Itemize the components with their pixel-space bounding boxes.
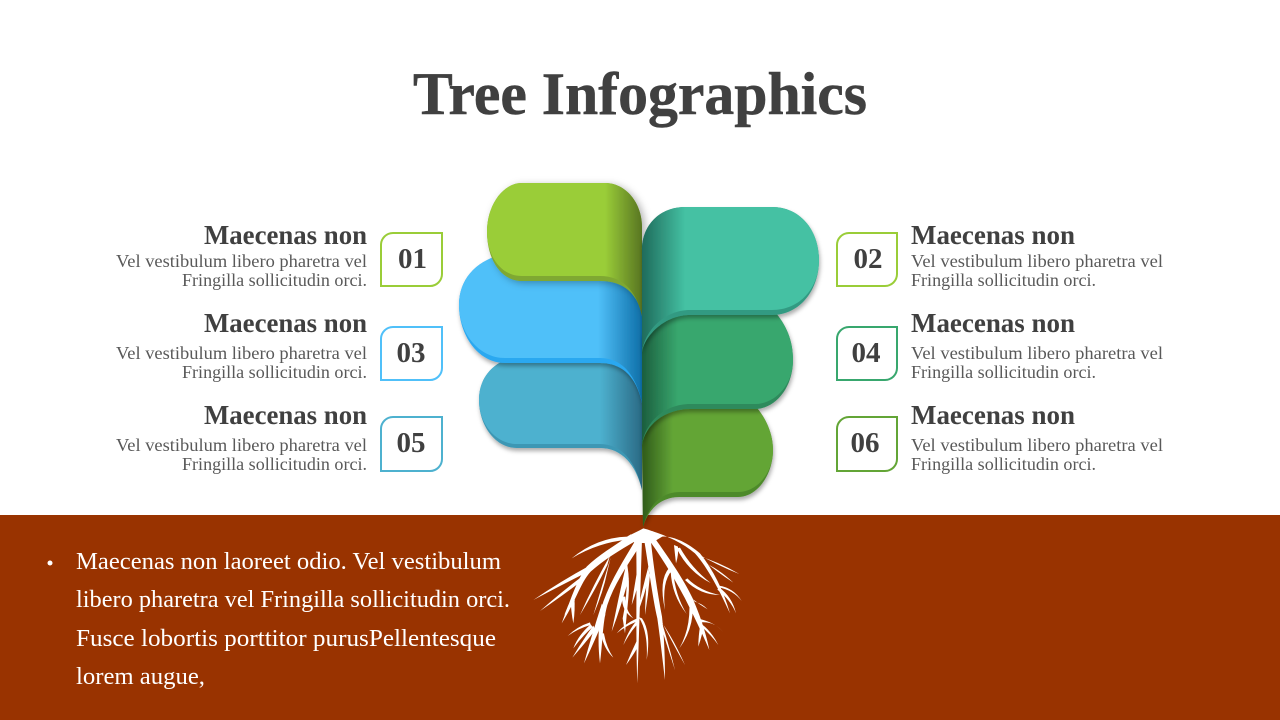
description 06: Fringilla sollicitudin orci.	[911, 454, 1096, 474]
badge 01: 01	[398, 243, 427, 275]
badge 04: 04	[852, 337, 880, 369]
description 05: Fringilla sollicitudin orci.	[182, 454, 367, 474]
description 01	[116, 251, 367, 290]
badge 05: 05	[396, 427, 426, 459]
badge 02	[837, 233, 897, 286]
description 04: Vel vestibulum libero pharetra vel	[911, 343, 1163, 363]
heading 06: Maecenas non	[911, 399, 1075, 430]
description 02	[911, 251, 1163, 290]
heading 04: Maecenas non	[911, 307, 1075, 338]
badge 02: 02	[854, 243, 882, 275]
bullet paragraph	[48, 549, 510, 690]
bullet paragraph: libero pharetra vel Fringilla sollicitudin orci.	[76, 587, 510, 613]
bullet paragraph: lorem augue,	[76, 664, 205, 690]
leaf 05	[479, 358, 642, 490]
badge 03	[381, 327, 442, 380]
badge 04	[837, 327, 897, 380]
item 05	[116, 399, 442, 474]
leaf 03	[459, 255, 642, 403]
item 06	[837, 399, 1163, 474]
badge 06	[837, 417, 897, 471]
title: Tree Infographics	[413, 61, 867, 127]
description 05	[116, 435, 367, 474]
leaf 04	[642, 312, 793, 445]
description 05: Vel vestibulum libero pharetra vel	[116, 435, 367, 455]
item 01	[116, 219, 442, 290]
leaf 06	[642, 408, 773, 527]
description 03: Vel vestibulum libero pharetra vel	[116, 343, 367, 363]
heading 03: Maecenas non	[204, 307, 367, 338]
description 02: Fringilla sollicitudin orci.	[911, 270, 1096, 290]
description 03	[116, 343, 367, 382]
badge 05	[381, 417, 442, 471]
description 02: Vel vestibulum libero pharetra vel	[911, 251, 1163, 271]
bullet paragraph: Maecenas non laoreet odio. Vel vestibulum	[76, 549, 501, 575]
item 03	[116, 307, 442, 382]
badge 06: 06	[850, 427, 880, 459]
bullet paragraph: Fusce lobortis porttitor purusPellentesque	[76, 626, 496, 652]
description 01: Vel vestibulum libero pharetra vel	[116, 251, 367, 271]
heading 02: Maecenas non	[911, 219, 1075, 250]
description 04: Fringilla sollicitudin orci.	[911, 362, 1096, 382]
heading 01: Maecenas non	[204, 219, 367, 250]
leaf 01	[487, 183, 642, 316]
description 06	[911, 435, 1163, 474]
item 02	[837, 219, 1163, 290]
badge 03: 03	[396, 337, 426, 369]
heading 05: Maecenas non	[204, 399, 367, 430]
description 06: Vel vestibulum libero pharetra vel	[911, 435, 1163, 455]
badge 01	[381, 233, 442, 286]
item 04	[837, 307, 1163, 382]
tree crown	[459, 183, 819, 527]
tree roots	[533, 528, 742, 683]
description 04	[911, 343, 1163, 382]
leaf 02	[642, 207, 819, 352]
description 03: Fringilla sollicitudin orci.	[182, 362, 367, 382]
description 01: Fringilla sollicitudin orci.	[182, 270, 367, 290]
ground band	[0, 515, 1280, 720]
